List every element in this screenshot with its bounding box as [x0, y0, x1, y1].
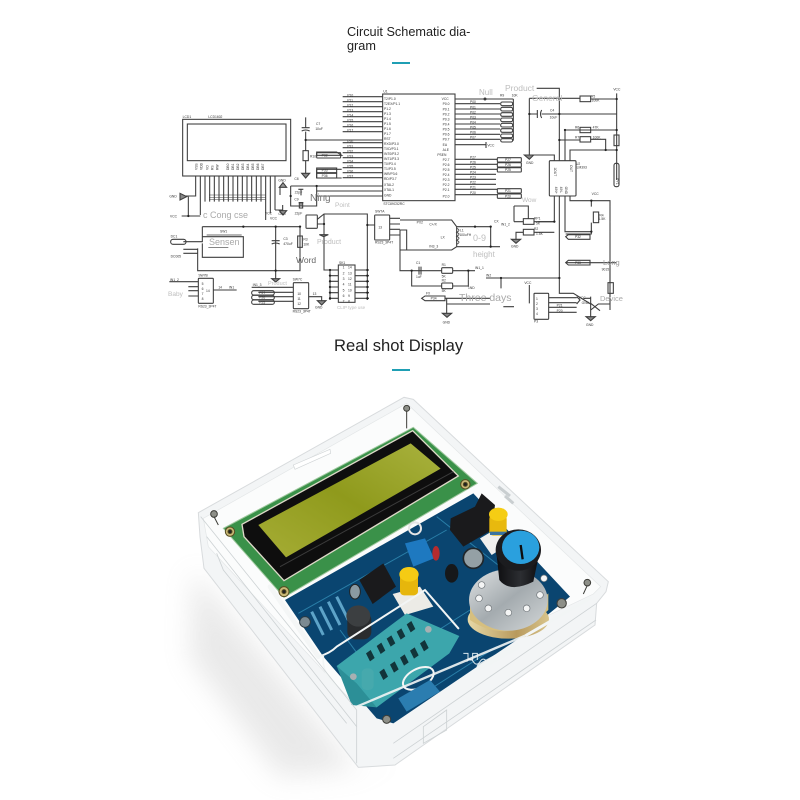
RC input network: IN2 — [486, 274, 491, 278]
switch SW7B: IN1 — [229, 286, 234, 290]
port 0 wires and resistor pack R9: P04 — [470, 120, 476, 124]
mounting screws — [211, 405, 591, 723]
switch SW7C: 12 — [297, 302, 301, 306]
connector P3 and transistor: P3 — [534, 320, 538, 324]
header P1 and DIP socket: 3 — [343, 277, 345, 281]
LM393 comparator and its network: R5 — [591, 94, 595, 98]
P32 and P33 pins: P33 — [575, 261, 581, 265]
header P1 and DIP socket: 13 — [348, 271, 352, 275]
LCD1602 module symbol: RW — [216, 164, 220, 170]
port 2 wires: P25 — [470, 166, 476, 170]
port 2 wires: P20 — [470, 191, 476, 195]
LM393 comparator and its network: 1.5K — [599, 217, 606, 221]
power wiring near LCD: VCC — [170, 214, 178, 218]
port 0 wires and resistor pack R9: 10K — [512, 94, 518, 98]
LM393 comparator and its network: U2 — [576, 162, 580, 166]
STC89C52RC microcontroller: P2.0 — [443, 194, 450, 198]
slide opening — [399, 662, 437, 694]
reset capacitor and resistor: C7 — [316, 122, 320, 126]
microcontroller port wires: P12 — [347, 103, 353, 107]
connector P3 and transistor: 2 — [536, 302, 538, 306]
header P1 and DIP socket: 2 — [343, 271, 345, 275]
port 2 wires: P21 — [505, 189, 511, 193]
trimmer and inductor network: IN1_2 — [501, 222, 510, 226]
header P1 and DIP socket: 5 — [343, 288, 345, 292]
title: circuit schematic — [347, 25, 470, 52]
crystal capacitors: C9 — [294, 198, 299, 202]
grey watermark labels over schematic: Device — [600, 294, 623, 303]
LM393 comparator and its network: 100K — [593, 136, 601, 140]
LM393 comparator and its network: 10uF — [550, 116, 557, 120]
microcontroller port wires: P37 — [347, 174, 353, 178]
connector P3 and transistor: 9015 — [602, 268, 609, 272]
grey watermark labels over schematic: Product — [317, 239, 341, 246]
switch SW7C: P26 — [259, 296, 265, 300]
port 0 wires and resistor pack R9: P01 — [470, 105, 476, 109]
reset capacitor and resistor: P33 — [322, 169, 328, 173]
trimmer and inductor network: LX — [441, 235, 446, 239]
resistor cluster — [300, 597, 348, 635]
port 0 wires and resistor pack R9: P02 — [470, 110, 476, 114]
STC89C52RC microcontroller: P1.4 — [384, 117, 391, 121]
STC89C52RC microcontroller: P1.6 — [384, 127, 391, 131]
switch SW7B: SW7B — [198, 274, 209, 278]
trimmer and inductor network: 100uFH — [459, 233, 472, 237]
power input and switch SW1: DC005 — [171, 254, 181, 258]
header P1 and DIP socket: 6 — [343, 294, 345, 298]
STC89C52RC microcontroller: TXD/P3.1 — [384, 147, 399, 151]
switch SW7C: RS23_3P4T — [293, 309, 311, 313]
LM393 comparator and its network: 4IN- — [559, 187, 563, 193]
connector P3 and transistor: VCC — [524, 281, 532, 285]
port 2 wires: P24 — [470, 171, 476, 175]
header P1 and DIP socket: 9 — [348, 294, 350, 298]
schematic diagram — [169, 88, 621, 327]
STC89C52RC microcontroller: P2.1 — [443, 188, 450, 192]
STC89C52RC microcontroller: RD/P3.7 — [384, 177, 397, 181]
grey watermark labels over schematic: Product — [268, 281, 287, 287]
port 0 wires and resistor pack R9: VCC — [487, 143, 495, 147]
STC89C52RC microcontroller: WR/P3.6 — [384, 172, 397, 176]
LM393 comparator and its network: 100K — [592, 98, 600, 102]
microcontroller port wires: P13 — [347, 108, 353, 112]
LCD mounting holes — [225, 480, 470, 597]
port 2 wires: P23 — [470, 176, 476, 180]
title: circuit schematic: Circuit Schematic dia- — [347, 25, 470, 39]
LCD display — [242, 431, 458, 581]
RC input network: 5K — [442, 289, 447, 293]
reset capacitor and resistor: P36 — [322, 174, 328, 178]
acrylic edge lines — [201, 517, 597, 763]
STC89C52RC microcontroller: RST — [384, 137, 391, 141]
grey watermark labels over schematic: CLIP type use — [337, 305, 366, 310]
power input and switch SW1: VCC — [270, 216, 278, 220]
STC89C52RC microcontroller: STC89C52RC — [383, 202, 405, 206]
DIP chip — [359, 563, 396, 604]
STC89C52RC microcontroller: P1.2 — [384, 107, 391, 111]
STC89C52RC microcontroller: T1/P3.5 — [384, 167, 396, 171]
trimmer and inductor network: 5K — [536, 221, 541, 225]
STC89C52RC microcontroller: P2.7 — [443, 158, 450, 162]
switch SW7C: 11 — [297, 297, 301, 301]
switch SW7C: P27 — [259, 291, 265, 295]
LM393 comparator and its network: GND — [526, 161, 534, 165]
STC89C52RC microcontroller: PSEN — [437, 153, 447, 157]
port 0 wires and resistor pack R9: P03 — [470, 115, 476, 119]
STC89C52RC microcontroller — [383, 89, 455, 206]
LM393 comparator and its network: 4IN+ — [554, 187, 558, 194]
switch SW7B: 6 — [202, 287, 204, 291]
switch SW7C: GND — [315, 305, 323, 309]
accent dash: schematic — [392, 62, 410, 64]
accent dash: photo — [392, 369, 410, 371]
grey watermark labels over schematic: c Cong cse — [203, 210, 248, 220]
right half junction dots — [410, 98, 618, 279]
STC89C52RC microcontroller: P1.7 — [384, 132, 391, 136]
LCD1602 module symbol: DB0 — [226, 163, 230, 170]
grey watermark labels over schematic: Three days — [459, 292, 512, 304]
switch SW7B: 8 — [202, 297, 204, 301]
switch SW7C: SW7C — [293, 278, 303, 282]
trimmer and inductor network: L1 — [460, 229, 464, 233]
power input and switch SW1: 470uF — [283, 242, 293, 246]
switch SW7B — [169, 274, 237, 308]
port 2 wires: P27 — [470, 156, 476, 160]
STC89C52RC microcontroller: P2.2 — [443, 183, 450, 187]
LM393 comparator and its network: LM393 — [577, 166, 587, 170]
power input and switch SW1: DC1 — [171, 234, 177, 238]
small capacitor — [350, 584, 360, 599]
header P1 and DIP socket — [306, 214, 369, 304]
crystal capacitors: 22pF — [295, 190, 302, 194]
microcontroller port wires: P11 — [347, 98, 353, 102]
connector P3 and transistor: 4 — [536, 312, 538, 316]
trimmer and inductor network: PX2 — [417, 220, 423, 224]
STC89C52RC microcontroller: XTAL1 — [384, 188, 394, 192]
power input and switch SW1: C3 — [283, 237, 288, 241]
LCD1602 module symbol: DB4 — [246, 163, 250, 170]
STC89C52RC microcontroller: T0/P3.4 — [384, 162, 396, 166]
trimmer and inductor network: CX — [494, 220, 499, 224]
grey watermark labels over schematic: Product — [505, 83, 535, 93]
microcontroller port wires: P36 — [347, 169, 353, 173]
acrylic case body — [198, 397, 608, 767]
header P1 and DIP socket: 12 — [348, 277, 352, 281]
FX pin and ground: GND — [443, 320, 451, 324]
switch SW7B: IN1_2 — [170, 278, 179, 282]
port 0 wires and resistor pack R9 — [455, 94, 518, 148]
rotary switch — [468, 569, 549, 639]
switch SW7B: 7 — [202, 292, 204, 296]
port 0 wires and resistor pack R9: P06 — [470, 131, 476, 135]
connector P3 and transistor: GND — [586, 323, 594, 327]
microcontroller port wires: P35 — [347, 164, 353, 168]
STC89C52RC microcontroller: P0.2 — [443, 112, 450, 116]
STC89C52RC microcontroller: RXD/P3.0 — [384, 142, 399, 146]
STC89C52RC microcontroller: P1.3 — [384, 112, 391, 116]
port 2 wires: P26 — [470, 161, 476, 165]
switch SW7B: 14 — [218, 286, 222, 290]
ZIF test socket — [337, 613, 459, 707]
microcontroller port wires: P16 — [347, 123, 353, 127]
STC89C52RC microcontroller: P2.3 — [443, 178, 450, 182]
RC input network — [400, 230, 559, 293]
STC89C52RC microcontroller: P0.6 — [443, 133, 450, 137]
switch SW7C: P25 — [259, 300, 265, 304]
acrylic front rim — [270, 587, 590, 707]
LCD1602 module symbol: DB3 — [241, 163, 245, 170]
switch SW7A — [367, 210, 400, 244]
grey watermark labels over schematic: Baby — [168, 291, 184, 298]
header P1 and DIP socket: 8 — [348, 300, 350, 304]
STC89C52RC microcontroller: P0.3 — [443, 117, 450, 121]
test loop — [409, 522, 421, 534]
STC89C52RC microcontroller: ALE — [443, 148, 450, 152]
grey watermark labels over schematic: Point — [335, 202, 350, 209]
grey watermark labels over schematic: Sensen — [209, 237, 240, 247]
green LCD board — [223, 427, 477, 597]
reset capacitor and resistor: R10 — [310, 154, 316, 158]
port 2 wires: P27 — [505, 158, 511, 162]
microcontroller port wires: P31 — [347, 144, 353, 148]
port 2 wires: P22 — [470, 181, 476, 185]
switch SW7C: 13 — [313, 292, 317, 296]
STC89C52RC microcontroller: P2.5 — [443, 168, 450, 172]
STC89C52RC microcontroller: VCC — [442, 97, 449, 101]
LM393 comparator and its network: VCC — [592, 192, 599, 196]
STC89C52RC microcontroller: P0.4 — [443, 122, 450, 126]
power input and switch SW1 — [171, 216, 310, 282]
STC89C52RC microcontroller: INT0/P3.2 — [384, 152, 399, 156]
LCD1602 module symbol: RS — [210, 165, 214, 170]
LM393 comparator and its network: OUT — [569, 165, 573, 172]
grey watermark labels over schematic: 0-9 — [473, 233, 486, 243]
STC89C52RC microcontroller: P0.5 — [443, 127, 450, 131]
STC89C52RC microcontroller: P0.7 — [443, 138, 450, 142]
LM393 comparator and its network: R6 — [575, 125, 579, 129]
LM393 comparator and its network: PY1 — [615, 178, 619, 185]
LCD1602 module symbol: DB2 — [236, 163, 240, 170]
header P1 and DIP socket: 4 — [343, 283, 345, 287]
trimmer and inductor network — [400, 206, 554, 250]
connector P3 and transistor: GND — [582, 301, 590, 305]
RC input network: 1uF — [416, 275, 422, 279]
LCD1602 module symbol — [183, 115, 291, 215]
grey watermark labels over schematic: Long — [603, 258, 620, 267]
LM393 comparator and its network: GND — [564, 187, 568, 195]
schematic right half — [383, 88, 621, 327]
switch SW7C — [252, 278, 326, 313]
crystal capacitors: 22pF — [295, 211, 302, 215]
RC input network: R2 — [442, 278, 446, 282]
connector P3 and transistor: 1 — [536, 297, 538, 301]
microcontroller port wires: P14 — [347, 113, 353, 117]
STC89C52RC microcontroller: P0.1 — [443, 107, 450, 111]
RC input network: C1 — [416, 261, 420, 265]
port 2 wires — [455, 156, 521, 198]
LM393 comparator and its network: 47K — [593, 125, 599, 129]
header P1 and DIP socket: 14 — [348, 266, 352, 270]
switch SW7A: SW7A — [375, 210, 385, 214]
STC89C52RC microcontroller: GND — [384, 194, 392, 198]
blue knob — [496, 529, 541, 587]
power button — [480, 508, 510, 555]
crystal capacitors — [291, 177, 317, 215]
connector P3 and transistor: VCC — [579, 296, 586, 300]
trimmer and inductor network: IN3_3 — [429, 245, 438, 249]
LCD1602 module symbol: DB1 — [231, 163, 235, 170]
port 0 wires and resistor pack R9: P00 — [470, 100, 476, 104]
LCD1602 module symbol: DB6 — [256, 163, 260, 170]
DC power jack — [450, 493, 495, 547]
grey watermark labels over schematic: height — [473, 250, 496, 259]
power input and switch SW1: SW1 — [220, 230, 227, 234]
power wiring near LCD: GND — [169, 194, 177, 198]
LM393 comparator and its network: R4 — [599, 214, 604, 218]
connector P3 and transistor: 3 — [536, 307, 538, 311]
switch SW7A: 13 — [378, 225, 382, 229]
connector P3 and transistor — [524, 268, 613, 327]
switch SW7A: RS23_3P4T — [375, 240, 393, 244]
microcontroller port wires: P30 — [347, 139, 353, 143]
trimmer and inductor network: C+/X — [429, 222, 438, 226]
grey watermark labels over schematic — [168, 83, 623, 310]
STC89C52RC microcontroller: T2/P1.0 — [384, 97, 396, 101]
cast shadow — [190, 570, 400, 777]
P32 and P33 pins: P32 — [575, 235, 581, 239]
STC89C52RC microcontroller: P0.0 — [443, 102, 450, 106]
port 0 wires and resistor pack R9: R9 — [500, 94, 504, 98]
STC89C52RC microcontroller: U1 — [383, 89, 388, 93]
red LED — [432, 546, 440, 561]
trimmer and inductor network: RP1 — [534, 216, 541, 220]
LCD1602 module symbol: VDD — [200, 162, 204, 170]
header P1 and DIP socket: 10 — [348, 288, 352, 292]
microcontroller port wires — [291, 93, 383, 196]
switch SW7C: IN1_3 — [253, 283, 262, 287]
blue trimmer — [405, 538, 434, 567]
LM393 comparator and its network — [524, 88, 621, 310]
power input and switch SW1: R3 — [303, 238, 308, 242]
microcontroller port wires: P32 — [347, 149, 353, 153]
switch SW7B: 14 — [206, 289, 210, 293]
LM393 comparator and its network: C4 — [550, 109, 554, 113]
FX pin and ground — [422, 291, 514, 324]
STC89C52RC microcontroller: P1.5 — [384, 122, 391, 126]
crystal capacitors: C8 — [294, 177, 299, 181]
connector P3 and transistor: P20 — [557, 309, 563, 313]
port 2 wires: P26 — [505, 163, 511, 167]
RC input network: R1 — [442, 263, 446, 267]
grey watermark labels over schematic: Word — [296, 255, 316, 265]
LCD1602 module symbol: DB5 — [251, 163, 255, 170]
header P1 and DIP socket: 7 — [343, 300, 345, 304]
reset capacitor and resistor: 10uF — [315, 127, 323, 131]
LM393 comparator and its network: VCC — [613, 88, 621, 92]
microcontroller port wires: P17 — [347, 128, 353, 132]
header P1 and DIP socket: SK1 — [339, 261, 345, 265]
power wiring near LCD: GND — [278, 179, 286, 183]
STC89C52RC microcontroller: P2.4 — [443, 173, 450, 177]
port 0 wires and resistor pack R9: P07 — [470, 136, 476, 140]
LCD1602 module symbol: LCD1602 — [208, 115, 223, 119]
LM393 comparator and its network: R7 — [575, 136, 579, 140]
schematic left half — [169, 93, 400, 313]
RC input network: 1ND — [468, 286, 475, 290]
switch SW7B: 5 — [202, 282, 204, 286]
lower pcb details — [398, 680, 440, 712]
FX pin and ground: FX — [426, 291, 431, 295]
grey watermark labels over schematic: General — [532, 93, 562, 103]
microcontroller port wires: P33 — [347, 154, 353, 158]
grey watermark labels over schematic: Ning — [310, 193, 331, 204]
inductor — [346, 605, 371, 639]
capacitor near knob — [463, 548, 483, 568]
port 2 wires: P20 — [505, 194, 511, 198]
header P1 and DIP socket: 1 — [343, 266, 345, 270]
circuit board — [285, 493, 570, 723]
reset capacitor and resistor — [302, 117, 342, 178]
STC89C52RC microcontroller: EA — [443, 143, 448, 147]
transistor — [445, 564, 458, 583]
reset capacitor and resistor: P32 — [322, 154, 328, 158]
switch SW7C: 10 — [297, 292, 301, 296]
power wiring near LCD: VCC — [265, 212, 273, 216]
title: real shot display: Real shot Display — [334, 336, 463, 355]
product photo — [190, 397, 608, 777]
STC89C52RC microcontroller: XTAL2 — [384, 183, 394, 187]
grey watermark labels over schematic: Wow — [522, 197, 537, 204]
connector P3 and transistor: P21 — [557, 304, 563, 308]
yellow test button — [393, 567, 433, 615]
microcontroller port wires: P10 — [347, 93, 353, 97]
junction dots — [187, 139, 368, 299]
trimmer and inductor network: 1.5K — [536, 232, 544, 236]
microcontroller port wires: P15 — [347, 118, 353, 122]
LCD1602 module symbol: VO — [205, 165, 209, 170]
STC89C52RC microcontroller: T2EX/P1.1 — [384, 102, 400, 106]
FX pin and ground: P34 — [431, 297, 437, 301]
microcontroller port wires: P34 — [347, 159, 353, 163]
LCD1602 module symbol: LCD1 — [183, 115, 191, 119]
title: circuit schematic: gram — [347, 38, 376, 52]
RC input network: IN1_1 — [475, 266, 484, 270]
switch SW7B: RS23_3P4T — [198, 304, 216, 308]
STC89C52RC microcontroller: P2.6 — [443, 163, 450, 167]
LM393 comparator and its network: 1OUT — [553, 167, 557, 176]
power wiring near LCD: GND — [278, 212, 286, 216]
LCD1602 module symbol: VSS — [194, 163, 198, 170]
trimmer and inductor network: GND — [511, 245, 519, 249]
P32 and P33 pins — [566, 232, 617, 283]
port 2 wires: P25 — [505, 168, 511, 172]
STC89C52RC microcontroller: INT1/P3.3 — [384, 157, 399, 161]
power wiring near LCD — [169, 179, 287, 220]
trimmer and inductor network: R2 — [534, 227, 538, 231]
port 2 wires: P21 — [470, 186, 476, 190]
grey watermark labels over schematic: Null — [479, 88, 493, 97]
RC input network: 5K — [442, 274, 447, 278]
LCD1602 module symbol: DB7 — [261, 163, 265, 170]
port 0 wires and resistor pack R9: P05 — [470, 125, 476, 129]
header P1 and DIP socket: 11 — [348, 283, 352, 287]
power input and switch SW1: 10K — [303, 242, 310, 246]
